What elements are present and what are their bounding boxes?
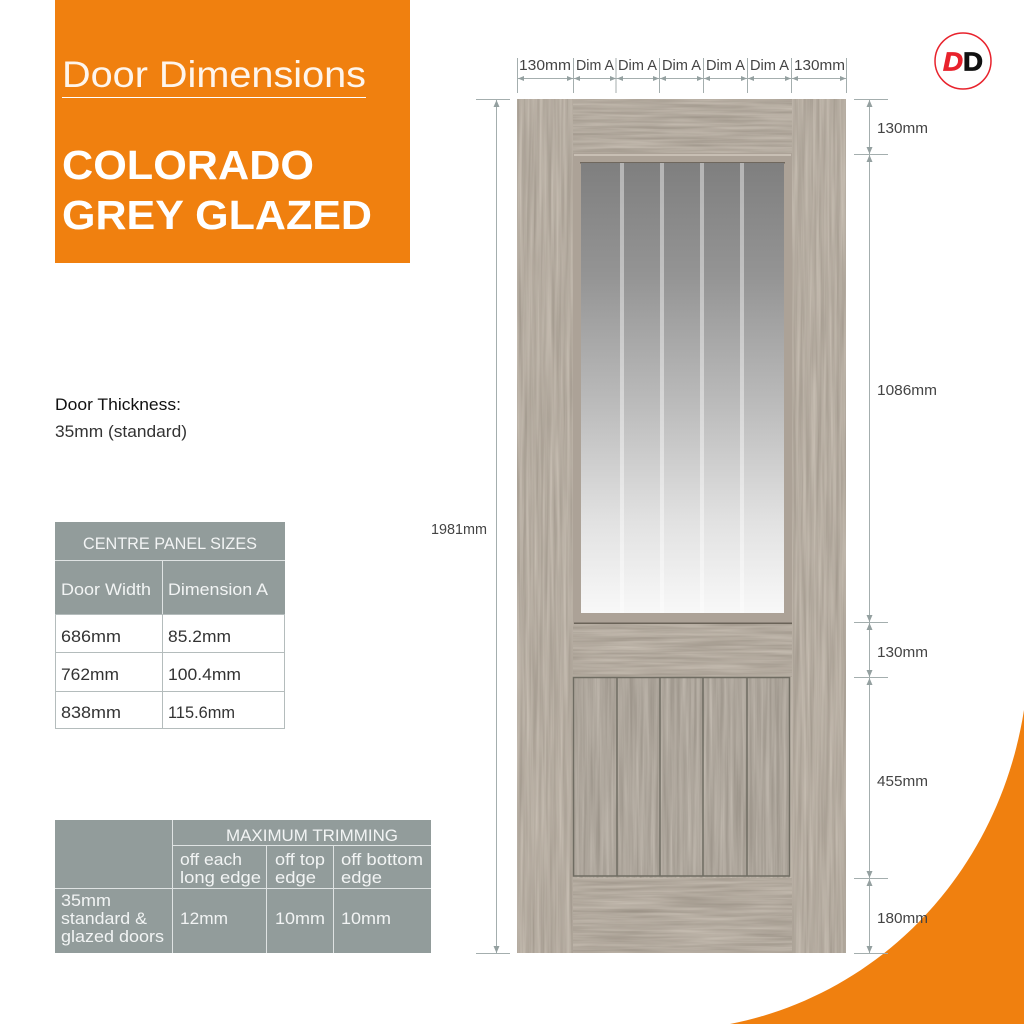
table: centre panel sizes: 100.4mm: [168, 666, 241, 684]
table: maximum trimming: standard &: [61, 910, 147, 928]
glazed panel: [573, 153, 792, 624]
left overall height dimension: 1981mm: [431, 522, 487, 538]
top width dimensions: Dim A: [750, 58, 789, 74]
top width dimensions: Dim A: [618, 58, 657, 74]
top width dimensions: Dim A: [662, 58, 701, 74]
top width dimensions: 130mm: [794, 58, 845, 74]
right height dimensions: 130mm: [877, 645, 928, 661]
door illustration: [517, 99, 846, 953]
table: centre panel sizes: Door Width: [61, 581, 151, 599]
logo: DD: D: [943, 46, 963, 76]
table: maximum trimming: [55, 820, 431, 953]
door thickness note: 35mm (standard): [55, 423, 187, 441]
table: centre panel sizes: [55, 522, 285, 729]
table: centre panel sizes: Dimension A: [168, 581, 268, 599]
table: maximum trimming: long edge: [180, 869, 261, 887]
title block: GREY GLAZED: [62, 192, 372, 238]
table: centre panel sizes: CENTRE PANEL SIZES: [83, 535, 257, 553]
table: maximum trimming: edge: [341, 869, 382, 887]
right height dimensions: 130mm: [877, 121, 928, 137]
top rail: [573, 99, 792, 154]
right height dimensions: 180mm: [877, 911, 928, 927]
table: maximum trimming: MAXIMUM TRIMMING: [226, 827, 398, 845]
table: maximum trimming: 35mm: [61, 892, 111, 910]
right height dimensions: [854, 100, 937, 954]
door thickness note: [55, 396, 187, 441]
table: maximum trimming: edge: [275, 869, 316, 887]
middle rail: [573, 624, 792, 677]
top width dimensions: Dim A: [706, 58, 745, 74]
door stiles: [517, 99, 846, 953]
left overall height dimension: [431, 100, 510, 954]
top width dimensions: Dim A: [576, 58, 614, 74]
table: maximum trimming: off bottom: [341, 851, 423, 869]
table: maximum trimming: off each: [180, 851, 242, 869]
title block: COLORADO: [62, 142, 314, 188]
logo: DD: [935, 33, 991, 89]
table: maximum trimming: 12mm: [180, 910, 228, 928]
right height dimensions: 1086mm: [877, 383, 937, 399]
table: centre panel sizes: 686mm: [61, 628, 121, 646]
table: centre panel sizes: 762mm: [61, 666, 119, 684]
door thickness note: Door Thickness:: [55, 396, 181, 414]
table: centre panel sizes: 115.6mm: [168, 704, 235, 722]
orange corner curve: [730, 710, 1024, 1024]
table: maximum trimming: 10mm: [341, 910, 391, 928]
top width dimensions: [518, 58, 846, 93]
table: centre panel sizes: 838mm: [61, 704, 121, 722]
table: maximum trimming: glazed doors: [61, 928, 164, 946]
table: maximum trimming: 10mm: [275, 910, 325, 928]
table: maximum trimming: off top: [275, 851, 325, 869]
bottom rail: [573, 878, 792, 953]
title block: [55, 0, 410, 263]
lower boarded panel: [574, 678, 790, 876]
table: centre panel sizes: 85.2mm: [168, 628, 231, 646]
top width dimensions: 130mm: [519, 58, 571, 74]
right height dimensions: 455mm: [877, 774, 928, 790]
title block: Door Dimensions: [62, 54, 366, 95]
logo: DD: D: [963, 46, 983, 76]
